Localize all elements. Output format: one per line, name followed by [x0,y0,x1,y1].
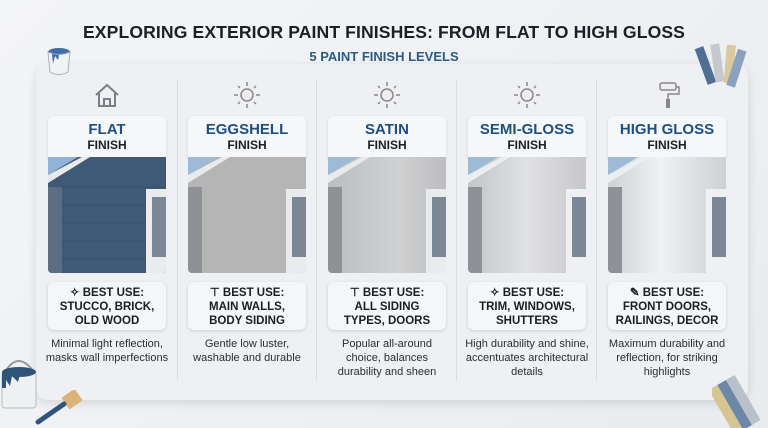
column: high gloss [607,82,727,378]
best use: FRONT DOORS, [623,301,711,313]
heading: FLAT [88,121,126,138]
heading: FINISH [367,138,407,152]
column: eggshell [187,82,307,364]
best use: ✎ BEST USE: [630,287,704,299]
main panel [36,64,748,400]
best use [328,282,446,330]
heading [48,116,166,158]
heading [608,116,726,158]
description: High durability and shine, accentuates architectural details [465,338,589,378]
title: EXPLORING EXTERIOR PAINT FINISHES: FROM FLAT TO HIGH GLOSS [83,22,685,42]
best use: MAIN WALLS, [209,301,285,313]
icon: house [95,84,119,107]
heading: FINISH [507,138,547,152]
image: satin house [328,157,446,273]
heading: FINISH [647,138,687,152]
heading: SEMI-GLOSS [480,121,574,138]
description: Popular all-around choice, balances durability and sheen [338,338,436,378]
heading: HIGH GLOSS [620,121,714,138]
subtitle: 5 PAINT FINISH LEVELS [309,49,459,64]
best use [608,282,726,330]
heading: EGGSHELL [206,121,288,138]
icon: paint can top [48,48,70,75]
icon: paint can bottom left [2,360,36,408]
best use: ✧ BEST USE: [490,287,564,299]
column: satin [327,82,447,378]
image: high gloss house [608,157,726,273]
column: flat [46,84,168,364]
best use [188,282,306,330]
heading: FINISH [227,138,267,152]
best use: STUCCO, BRICK, [60,301,154,313]
best use: ⊤ BEST USE: [210,287,284,299]
description: Minimal light reflection, masks wall imperfections [46,338,168,364]
heading [328,116,446,158]
heading: SATIN [365,121,409,138]
best use: ✧ BEST USE: [70,287,144,299]
best use [468,282,586,330]
best use: BODY SIDING [209,315,285,327]
icon: paint roller [659,82,680,108]
image: flat house [48,157,166,273]
best use: TRIM, WINDOWS, [479,301,575,313]
best use: ⊤ BEST USE: [350,287,424,299]
icon: color swatches top right [694,44,746,88]
description: Gentle low luster, washable and durable [193,338,301,364]
icon: sun [234,82,260,108]
heading [188,116,306,158]
best use: RAILINGS, DECOR [616,315,718,327]
icon: brush bottom left [36,390,82,424]
best use: OLD WOOD [75,315,139,327]
best use [48,282,166,330]
column: semi-gloss [465,82,589,378]
icon: sun [374,82,400,108]
best use: ALL SIDING [355,301,419,313]
icon: swatches bottom right [712,375,760,428]
heading [468,116,586,158]
image: eggshell house [188,157,306,273]
best use: SHUTTERS [496,315,558,327]
heading: FINISH [87,138,127,152]
icon: sun [514,82,540,108]
description: Maximum durability and reflection, for striking highlights [609,338,725,378]
image: semi-gloss house [468,157,586,273]
best use: TYPES, DOORS [344,315,430,327]
